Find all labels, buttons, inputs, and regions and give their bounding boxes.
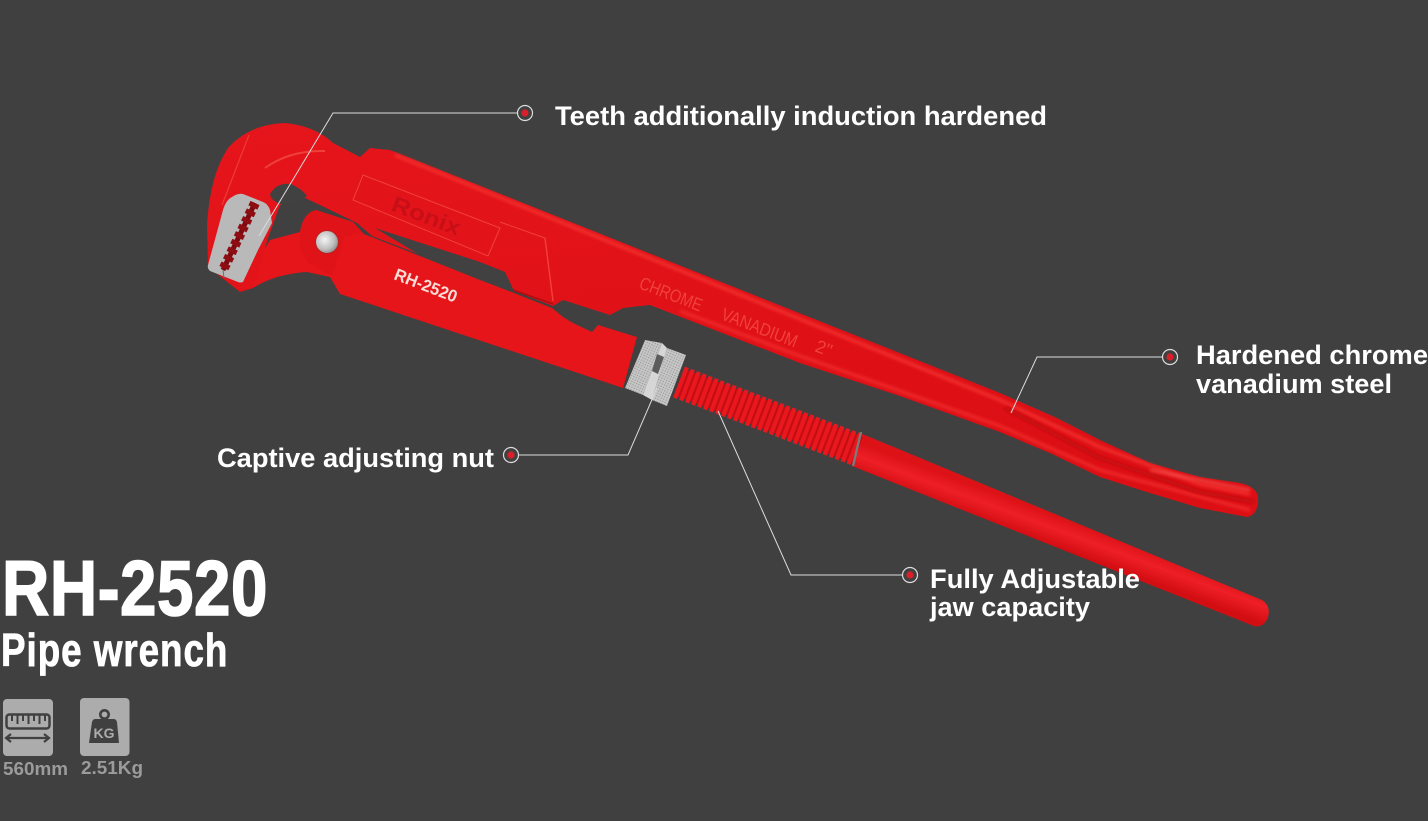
callout: steel: vanadium steel xyxy=(1196,369,1392,399)
slot between arms xyxy=(375,228,515,293)
upper jaw and handle body xyxy=(207,123,1258,517)
embossed label panel xyxy=(353,175,500,256)
callout: steel: Hardened chrome xyxy=(1196,340,1428,370)
title: model number: RH-2520 xyxy=(2,546,267,632)
spec: weight: 2.51Kg xyxy=(81,758,143,778)
threaded rod xyxy=(679,382,861,466)
hardened jaw teeth xyxy=(208,194,272,282)
callout: jaw capacity xyxy=(718,411,1140,622)
pipe wrench illustration xyxy=(207,123,1269,626)
icon: weight xyxy=(80,698,130,756)
movable lower arm xyxy=(240,210,637,388)
lower arm inner section xyxy=(300,210,364,276)
subtitle: Pipe wrench xyxy=(1,624,227,676)
callout: steel xyxy=(1011,340,1428,413)
spec: length: 560mm xyxy=(3,759,68,779)
callout: nut: Captive adjusting nut xyxy=(217,443,494,473)
embossed steel marking: VANADIUM xyxy=(719,304,800,351)
callout: jaw capacity: jaw capacity xyxy=(929,592,1090,622)
captive adjusting nut xyxy=(625,340,686,406)
icon: length xyxy=(3,699,53,756)
callout: teeth: Teeth additionally induction hardened xyxy=(555,101,1047,131)
callout: teeth xyxy=(259,101,1047,236)
hole in head xyxy=(270,184,307,204)
callout: nut xyxy=(217,388,657,473)
embossed brand: Ronix xyxy=(388,191,465,241)
handle highlights xyxy=(222,135,1254,510)
icon: weight: KG xyxy=(94,725,115,741)
embossed steel marking xyxy=(637,273,835,361)
embossed steel marking: CHROME xyxy=(637,273,705,315)
stamped model number: RH-2520 xyxy=(392,265,460,306)
embossed steel marking: 2" xyxy=(813,336,835,361)
lower handle xyxy=(852,434,1269,626)
callout: jaw capacity: Fully Adjustable xyxy=(930,564,1140,594)
pivot screw xyxy=(316,230,338,254)
